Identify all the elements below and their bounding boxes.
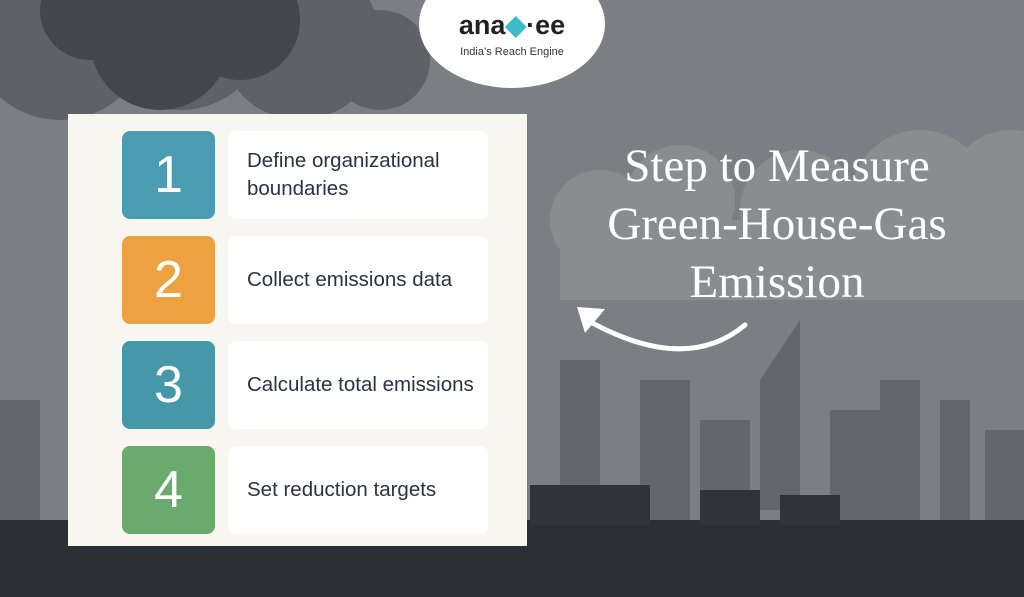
text: 2	[154, 251, 183, 309]
title: Emission	[690, 256, 864, 308]
text: Calculate total emissions	[247, 373, 474, 396]
text: 4	[154, 461, 183, 519]
title: Step to Measure	[624, 140, 930, 192]
title: Green-House-Gas	[607, 198, 947, 250]
step 4	[122, 446, 488, 534]
text: Set reduction targets	[247, 478, 436, 501]
arrow	[577, 307, 748, 352]
tagline: India’s Reach Engine	[460, 46, 564, 58]
panel: steps	[68, 114, 527, 546]
logo text: ana◆·ee	[459, 10, 565, 40]
text: Collect emissions data	[247, 268, 452, 291]
text: boundaries	[247, 177, 348, 200]
step 3	[122, 341, 488, 429]
text: 3	[154, 356, 183, 414]
step 2	[122, 236, 488, 324]
logo badge	[419, 0, 605, 88]
text: Define organizational	[247, 149, 440, 172]
text: 1	[154, 146, 183, 204]
title	[607, 140, 947, 308]
step 1	[122, 131, 488, 219]
